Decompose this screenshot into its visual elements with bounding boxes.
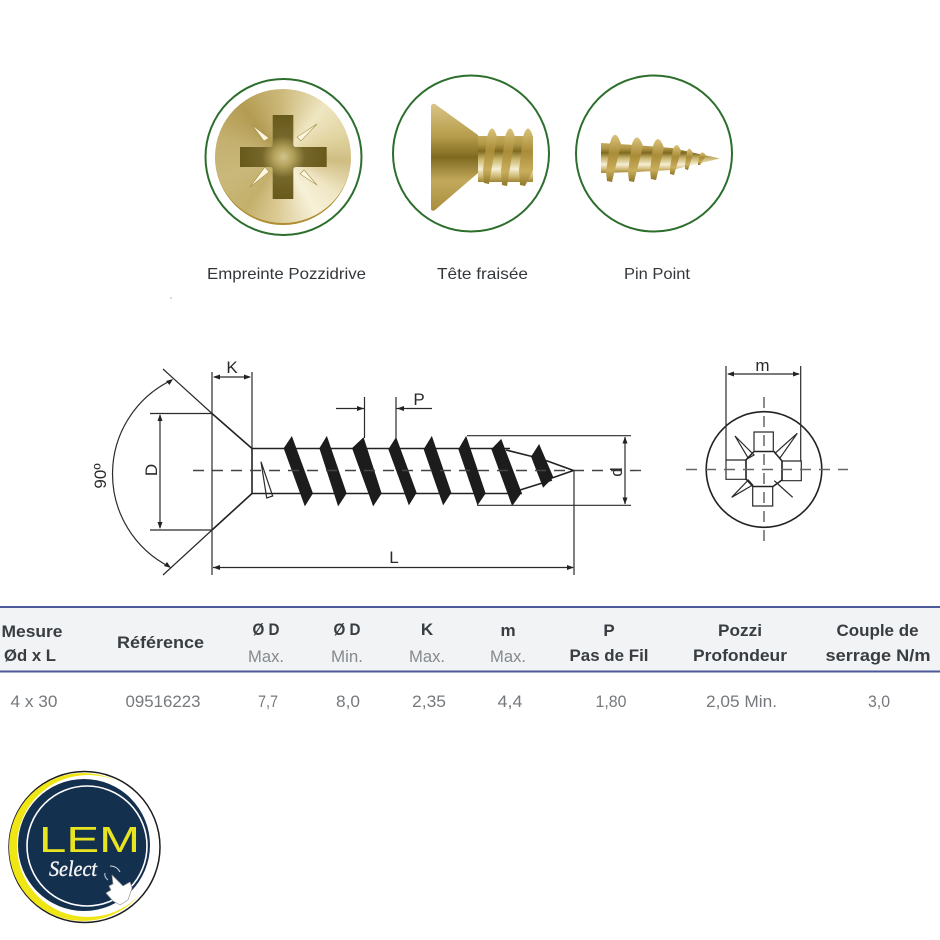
column: Ø D Min: Ø D [334,620,360,639]
screw threads [284,437,553,505]
column: Référence [117,633,204,711]
table header band [0,606,940,672]
column: P Pas de Fil [570,621,648,711]
dimension L: L [389,548,399,567]
icon: Pozzidrive recess [206,79,362,235]
column: Ø D Min: 8,0 [336,692,360,711]
specification table [0,606,940,711]
technical drawing: side view of the screw [91,358,645,575]
column: Pozzi Profondeur: 2,05 Min. [706,692,777,711]
dimension P [336,390,432,438]
dimension L [213,470,574,575]
column: m Max: m [500,621,516,640]
column: Couple de serrage: 3,0 [868,692,890,711]
caption: Empreinte Pozzidrive: Empreinte Pozzidrive [207,266,366,283]
dimension D [142,414,212,530]
column: K Max: 2,35 [412,692,446,711]
column: P Pas de Fil: Pas de Fil [570,646,648,665]
column: Mesure: Mesure [2,622,62,641]
column: Couple de serrage: serrage N/m [826,646,930,665]
column: Mesure: 4 x 30 [10,692,58,711]
caption: Pin Point: Pin Point [624,266,691,283]
icon: pin point tip [576,76,732,232]
column: Mesure: Ød x L [4,646,56,665]
column: Référence: Référence [117,633,204,652]
column: Pozzi Profondeur: Profondeur [693,646,787,665]
dimension K [212,358,252,575]
cross recess [726,432,801,506]
column: Ø D Max [248,620,284,711]
dimension 90 degrees: 90º [91,463,110,489]
column: K Max: K [421,620,434,639]
logo: LEM Select: Select [49,856,98,881]
dimension D: D [142,464,161,476]
column: Pozzi Profondeur [693,621,787,711]
dimension m [726,356,801,461]
dimension m: m [755,356,770,375]
dimension P: P [413,390,425,409]
column: m Max [490,621,526,711]
dimension K: K [226,358,238,377]
column: Ø D Max: Max. [248,648,284,666]
screw head and shank outline [212,414,574,530]
column: K Max [409,620,446,711]
centre lines [686,397,848,548]
column: P Pas de Fil: 1,80 [596,692,626,711]
head circle [706,412,822,527]
column: Ø D Min: Min. [331,648,363,666]
dimension d: d [607,467,626,477]
column: Ø D Min [331,620,363,711]
column: P Pas de Fil: P [603,621,615,640]
icon: countersunk head [393,76,549,232]
column: m Max: Max. [490,648,526,666]
column: m Max: 4,4 [498,692,522,711]
logo: LEM Select: LEM [39,819,140,860]
centre line [193,470,645,472]
caption: Tête fraisée: Tête fraisée [437,266,528,283]
column: Couple de serrage [826,621,930,711]
column: Référence: 09516223 [126,692,200,711]
column: Ø D Max: Ø D [252,620,280,639]
dimension 90 degrees [91,369,212,575]
icon: pointing hand [105,866,132,905]
technical drawing: top view of the recess [686,356,848,548]
column: Pozzi Profondeur: Pozzi [718,621,762,640]
logo: LEM Select [9,772,160,922]
column: Mesure [2,622,62,711]
column: Ø D Max: 7,7 [258,692,278,711]
dimension d [467,436,631,505]
column: Couple de serrage: Couple de [836,621,918,640]
column: K Max: Max. [409,648,445,666]
